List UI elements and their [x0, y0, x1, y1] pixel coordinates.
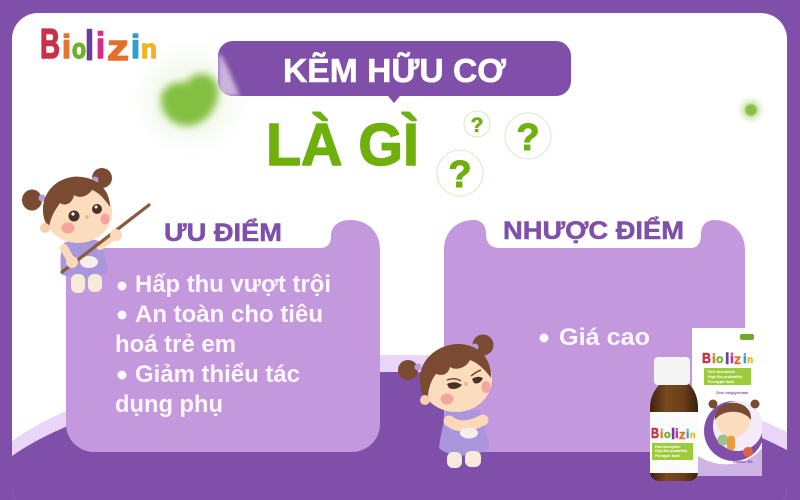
logo: n [141, 34, 157, 64]
icon: bottom question: ? [448, 154, 472, 196]
product box: Vitamin B6 [733, 460, 753, 464]
bottle logo: n [690, 430, 696, 440]
box logo: i [712, 351, 716, 366]
small green blob [740, 99, 762, 121]
head [44, 181, 112, 243]
arms [449, 420, 483, 426]
product box: Lysine [714, 451, 726, 455]
heading: NHƯỢC ĐIỂM [503, 216, 684, 245]
dress [439, 410, 489, 456]
legs [71, 274, 85, 293]
bottle small text: Pineapple taste [655, 454, 680, 458]
cheeks [62, 222, 74, 234]
bottle logo: B [651, 425, 659, 442]
box small text [708, 370, 742, 384]
list: hoá trẻ em [115, 331, 236, 358]
girl pointing [22, 168, 149, 293]
green blurred blob [144, 54, 236, 142]
head [420, 346, 492, 412]
product box [692, 328, 764, 476]
list: An toàn cho tiêu [135, 301, 323, 328]
hill background [12, 355, 787, 500]
bottle logo: i [660, 427, 663, 441]
arms [64, 235, 115, 262]
box logo: z [734, 351, 741, 367]
box small text: Fast absorption [708, 370, 735, 374]
icon: small question: ? [471, 114, 483, 137]
bottle small text: High Bio-availability [655, 449, 688, 453]
eyes [68, 210, 80, 222]
box small text: Pineapple taste [708, 380, 734, 384]
logo: i [62, 28, 71, 65]
bottle logo [651, 425, 696, 443]
bottle small text [655, 445, 688, 458]
logo: z [107, 27, 129, 68]
bottle logo: o [664, 429, 671, 441]
bottle logo: i [675, 426, 679, 441]
box logo: B [702, 350, 711, 367]
box logo: o [716, 352, 723, 366]
subtitle: LÀ GÌ [266, 112, 419, 178]
bottle small text: Fast absorption [655, 445, 680, 449]
panel: advantages [66, 218, 380, 452]
bottle logo: z [679, 427, 686, 442]
girl grumpy [398, 334, 494, 468]
logo [40, 20, 157, 69]
icon: right question: ? [516, 117, 540, 159]
cheeks [440, 394, 454, 404]
product box: Zinc bisglycinate [716, 390, 749, 395]
logo: B [40, 20, 60, 67]
box logo: i [743, 351, 747, 366]
stick [62, 205, 149, 272]
heading: ƯU ĐIỂM [164, 218, 282, 247]
title banner [218, 41, 571, 103]
box logo: l [725, 351, 729, 368]
list: dụng phụ [115, 391, 223, 418]
bottle logo: l [671, 426, 675, 443]
bottle logo: i [686, 427, 689, 441]
logo: o [72, 33, 86, 64]
box logo [702, 350, 753, 368]
logo: l [85, 22, 94, 69]
box logo: n [747, 355, 753, 366]
card shape [444, 220, 745, 452]
panel: disadvantages [444, 216, 745, 452]
logo: i [131, 28, 140, 65]
question mark icons [437, 111, 551, 196]
legs [447, 452, 462, 468]
logo: i [96, 25, 105, 66]
eyes [447, 382, 462, 389]
list: Hấp thu vượt trội [135, 271, 331, 298]
bottle [650, 357, 698, 481]
box small text: High Bio-availability [708, 375, 742, 379]
card shape [66, 220, 380, 452]
list: Giá cao [559, 324, 650, 351]
box logo: i [730, 350, 734, 366]
dress [60, 239, 108, 278]
list: Giảm thiểu tác [135, 361, 300, 388]
list [115, 271, 331, 418]
banner title text: KẼM HỮU CƠ [283, 52, 507, 89]
